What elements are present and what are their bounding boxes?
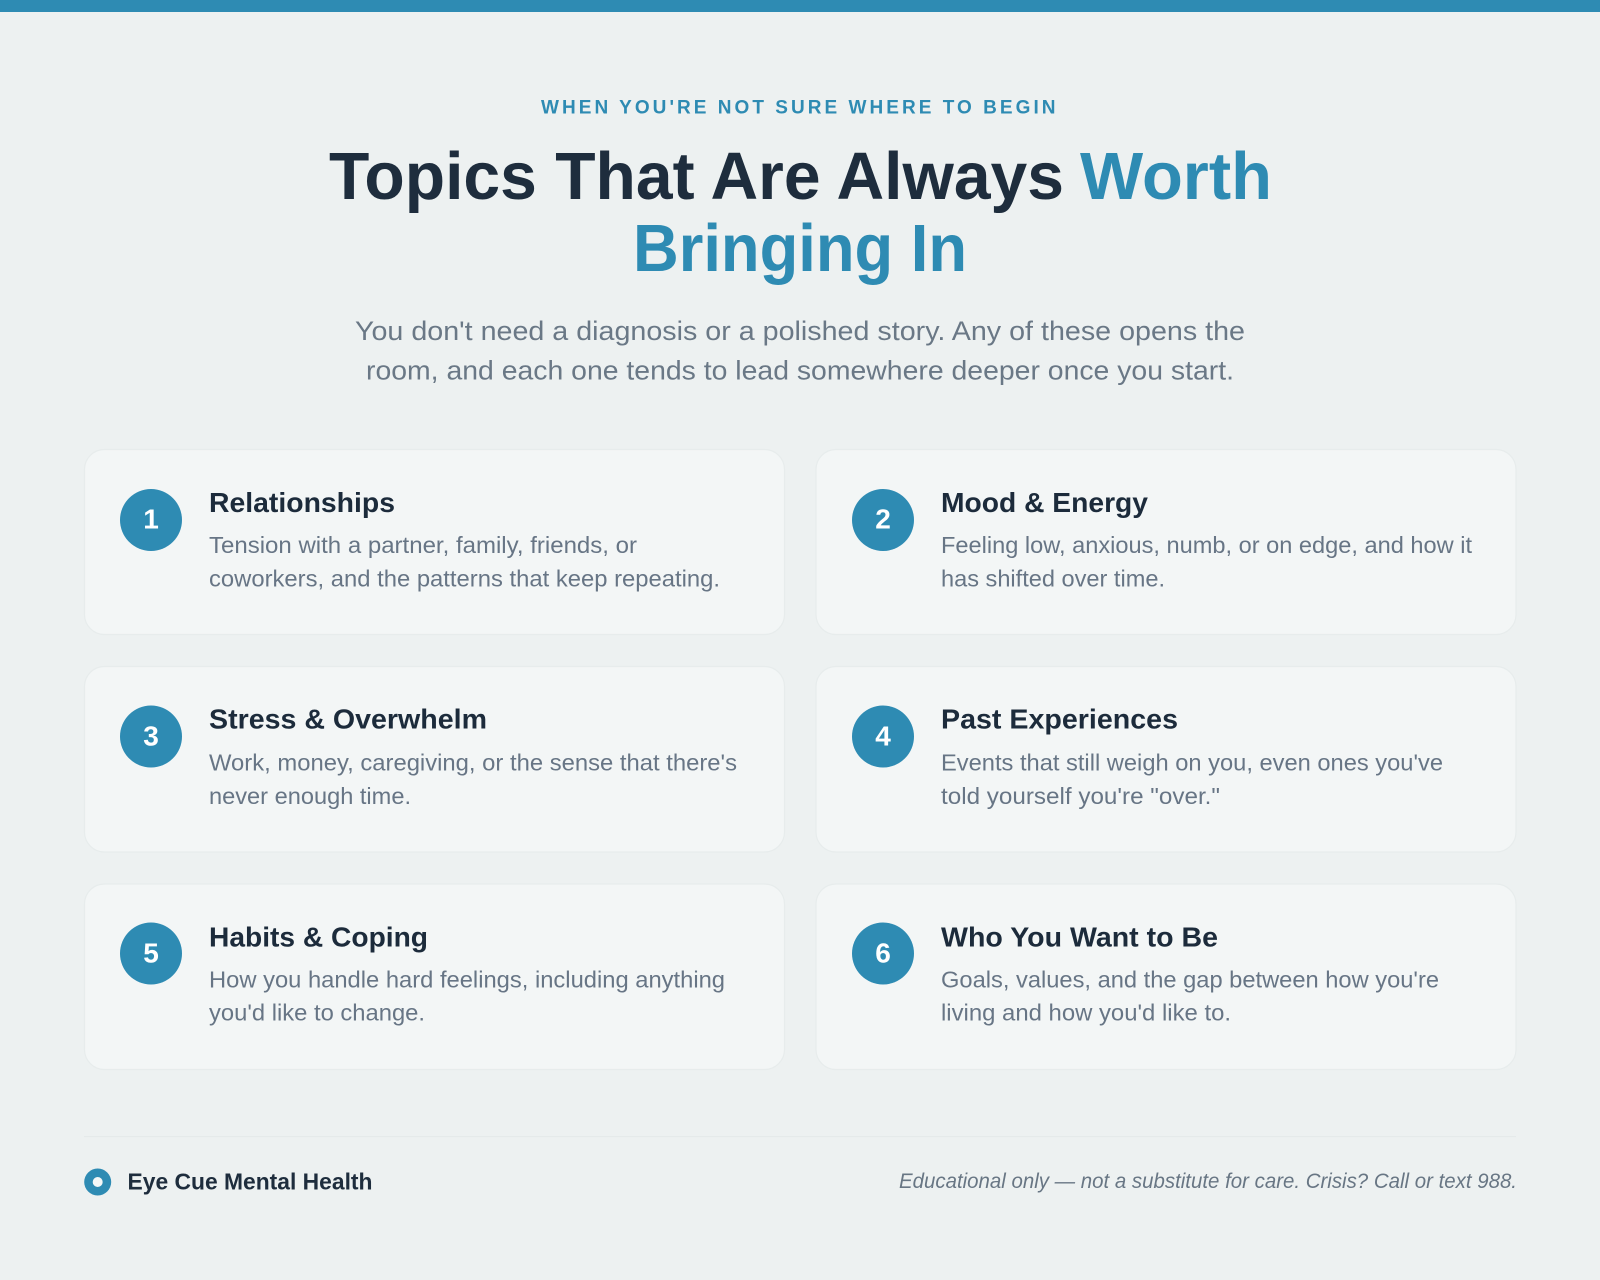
card description: How you handle hard feelings, including anything <box>209 966 725 992</box>
card background <box>816 884 1516 1070</box>
card background <box>84 666 784 852</box>
title: Worth <box>1080 139 1272 214</box>
panel: stress and overwhelm <box>84 666 784 852</box>
card background <box>816 450 1516 634</box>
card background <box>84 884 784 1070</box>
title <box>329 139 1272 286</box>
card description: Goals, values, and the gap between how you're <box>941 966 1439 992</box>
card title: Habits & Coping <box>209 922 428 952</box>
card title: Who You Want to Be <box>941 922 1218 952</box>
card background <box>84 450 784 634</box>
panel: who you want to be <box>816 884 1516 1070</box>
header <box>329 98 1272 386</box>
card description: Work, money, caregiving, or the sense that there's <box>209 750 737 776</box>
card title: Stress & Overwhelm <box>209 704 487 734</box>
top accent bar <box>0 0 1600 12</box>
number badge 6 <box>852 922 914 984</box>
number badge 5 <box>120 922 182 984</box>
card description: coworkers, and the patterns that keep repeating. <box>209 566 720 592</box>
number badge 2 <box>852 489 914 551</box>
subtitle: You don't need a diagnosis or a polished story. Any of these opens the <box>355 316 1245 346</box>
number badge 1 <box>120 489 182 551</box>
card description: living and how you'd like to. <box>941 1000 1231 1026</box>
footer <box>84 1168 1517 1196</box>
card description <box>209 750 737 809</box>
card description: Feeling low, anxious, numb, or on edge, and how it <box>941 532 1473 558</box>
disclaimer: Educational only — not a substitute for care. Crisis? Call or text 988. <box>899 1170 1517 1193</box>
number badge 3 <box>120 706 182 768</box>
card description <box>941 750 1443 809</box>
number badge 5: 5 <box>143 938 159 968</box>
panel: past experiences <box>816 666 1516 852</box>
card description: never enough time. <box>209 783 411 809</box>
card title: Mood & Energy <box>941 487 1148 518</box>
card title: Relationships <box>209 487 395 518</box>
card description <box>209 532 720 592</box>
card description <box>941 966 1439 1026</box>
panel: habits and coping <box>84 884 784 1070</box>
card description: has shifted over time. <box>941 566 1165 592</box>
title: Topics That Are Always <box>329 139 1064 214</box>
card description: Events that still weigh on you, even ones you've <box>941 750 1443 776</box>
eyebrow: WHEN YOU'RE NOT SURE WHERE TO BEGIN <box>541 98 1056 118</box>
card background <box>816 666 1516 852</box>
panel: mood and energy <box>816 450 1516 634</box>
number badge 6: 6 <box>875 938 891 968</box>
card title: Past Experiences <box>941 704 1178 734</box>
card description <box>941 532 1473 592</box>
number badge 1: 1 <box>143 504 159 534</box>
card description: you'd like to change. <box>209 1000 425 1026</box>
icon: brand mark <box>84 1168 111 1196</box>
card description: Tension with a partner, family, friends, or <box>209 532 637 558</box>
subtitle: room, and each one tends to lead somewhere deeper once you start. <box>366 356 1234 386</box>
title: Bringing In <box>633 211 967 286</box>
number badge 4: 4 <box>875 720 891 752</box>
panel: relationships <box>84 450 784 634</box>
subtitle <box>355 316 1245 386</box>
number badge 4 <box>852 706 914 768</box>
number badge 3: 3 <box>143 720 159 752</box>
brand name: Eye Cue Mental Health <box>128 1168 372 1194</box>
card description: told yourself you're "over." <box>941 783 1220 809</box>
card description <box>209 966 725 1026</box>
number badge 2: 2 <box>875 504 891 534</box>
